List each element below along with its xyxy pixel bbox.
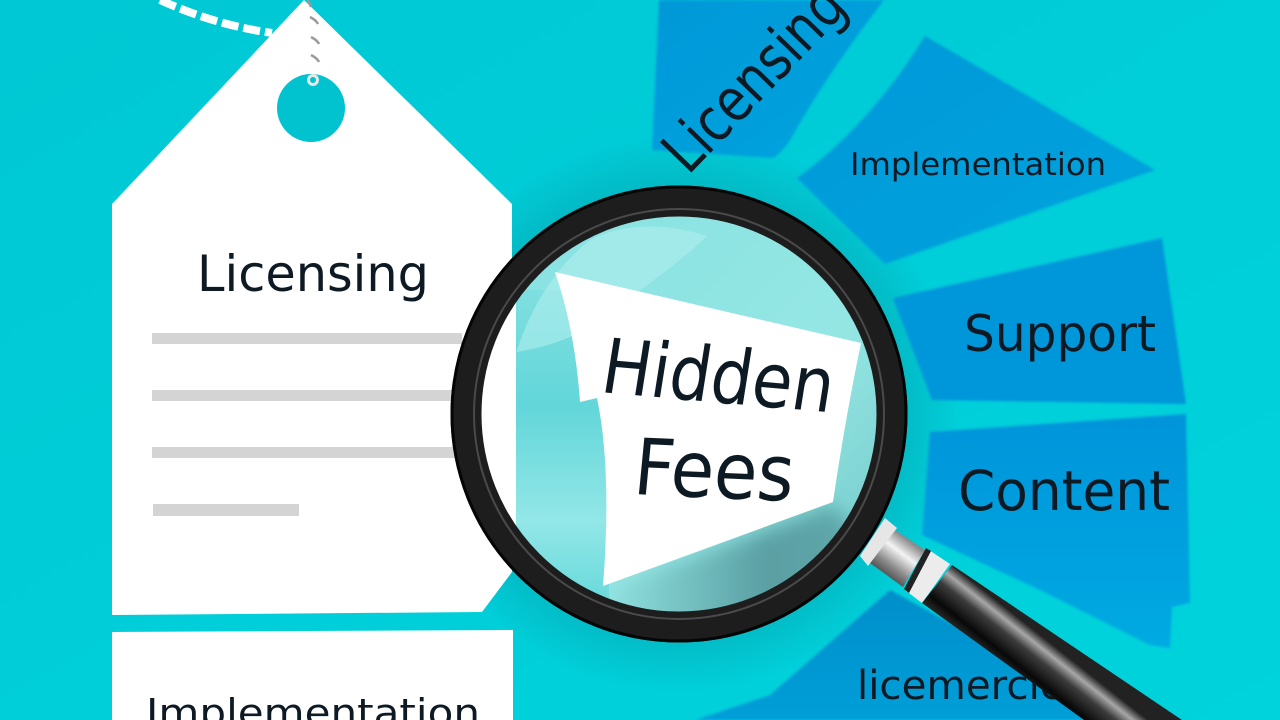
lens rim <box>452 187 906 641</box>
panel: blue implementation note <box>797 36 1155 264</box>
tag heading: Licensing <box>197 245 429 303</box>
label: commercial note: licemercic <box>857 663 1062 709</box>
panel: hidden fees note <box>555 272 861 586</box>
panel: blue support note <box>893 238 1186 404</box>
label: support note: Support <box>964 305 1156 363</box>
panel: blue commercial note <box>695 590 1090 720</box>
lens halo <box>400 134 960 694</box>
lens white left area <box>482 302 516 526</box>
panel: hidden fees note: Fees <box>630 423 799 520</box>
tag string <box>160 0 272 33</box>
icon: magnifying glass <box>452 187 1182 720</box>
panel: blue licensing note <box>648 0 884 186</box>
label: implementation note: Implementation <box>850 147 1106 183</box>
lens background <box>526 216 876 604</box>
note text: Hidden <box>596 322 841 430</box>
handle <box>860 518 1182 720</box>
label: content note: Content <box>958 459 1170 523</box>
panel: white price tag <box>112 0 512 615</box>
lens <box>512 216 876 612</box>
panel: blue content note <box>922 414 1190 648</box>
shadow under note <box>608 501 850 612</box>
tag text lines <box>152 333 462 516</box>
panel: white implementation card <box>112 630 513 720</box>
tag hole <box>277 74 345 142</box>
tag thread <box>308 0 319 84</box>
lens left band <box>516 290 610 620</box>
lens highlight <box>517 226 707 352</box>
